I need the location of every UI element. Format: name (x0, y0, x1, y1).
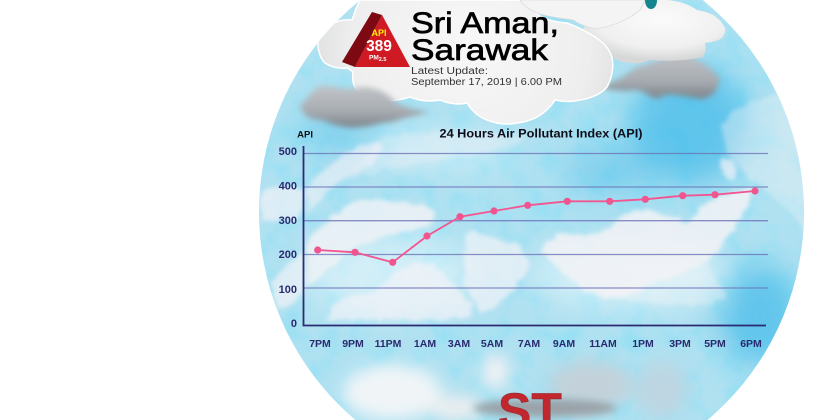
x axis labels: 5AM (481, 338, 503, 350)
x axis labels: 9AM (553, 338, 575, 350)
title (411, 7, 559, 67)
y axis labels (279, 130, 313, 330)
main title cloud (318, 0, 613, 124)
API line (314, 187, 759, 266)
watercolour clouds (262, 93, 810, 320)
y axis labels: 500 (279, 146, 297, 158)
x axis labels: 11AM (589, 338, 617, 350)
API triangle badge: 2.5 (379, 57, 386, 63)
white cloud top centre (520, 0, 645, 28)
deeper blue washes (300, 65, 800, 365)
sky background circle (255, 0, 810, 420)
line chart (279, 130, 768, 350)
y axis labels: 100 (279, 284, 297, 296)
title: Sarawak (411, 34, 549, 67)
y axis labels: 300 (279, 215, 297, 227)
grey cloud behind logo (473, 399, 617, 417)
x axis labels: 7AM (518, 338, 540, 350)
API triangle badge: PM (369, 54, 379, 62)
x axis labels: 7PM (309, 338, 331, 350)
pale cloud washes (305, 136, 730, 315)
grey cloud top right (600, 52, 720, 99)
update time: Latest Update: (411, 66, 488, 77)
white cloud top right (582, 0, 725, 63)
x axis labels: 5PM (704, 338, 726, 350)
x axis labels: 6PM (740, 338, 762, 350)
x axis labels: 3AM (448, 338, 470, 350)
y axis labels: 0 (291, 318, 297, 330)
API triangle badge: 389 (366, 38, 392, 55)
x axis labels (309, 338, 762, 350)
update time: September 17, 2019 | 6.00 PM (411, 77, 562, 88)
y axis labels: 200 (279, 249, 297, 261)
x axis labels: 1AM (414, 338, 436, 350)
grey cloud left (300, 86, 430, 127)
x axis labels: 11PM (375, 338, 402, 350)
y axis labels: API (297, 130, 313, 140)
x axis labels: 9PM (342, 338, 364, 350)
chart title: 24 Hours Air Pollutant Index (API) (440, 128, 643, 140)
teal dot (645, 0, 657, 9)
API triangle badge (342, 12, 410, 67)
x axis labels: 1PM (632, 338, 654, 350)
soft clouds at bottom (342, 354, 688, 420)
API triangle badge: API (371, 28, 387, 38)
y axis labels: 400 (279, 180, 297, 192)
update time (411, 66, 562, 88)
x axis labels: 3PM (669, 338, 691, 350)
title: Sri Aman, (411, 7, 559, 40)
